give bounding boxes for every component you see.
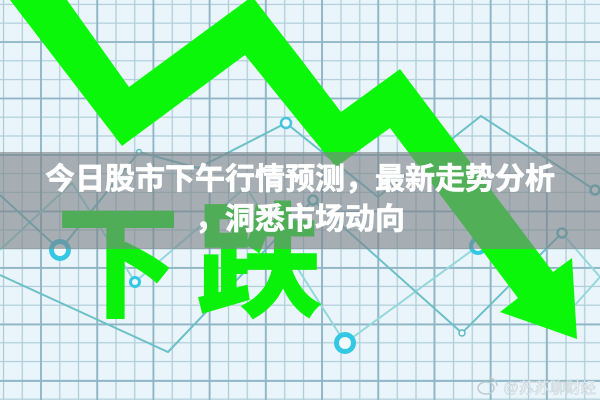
line chart: dark teal series <box>0 116 600 352</box>
translucent title band <box>0 152 600 249</box>
title: ，洞悉市场动向 <box>195 203 405 236</box>
lettering: 下: 下 <box>57 197 179 333</box>
title <box>45 162 555 236</box>
title: 今日股市下午行情预测，最新走势分析 <box>45 163 555 196</box>
watermark text: @苏苏聊财经 <box>503 379 596 397</box>
icon: weibo logo <box>478 378 497 394</box>
line chart: light teal series <box>0 183 600 343</box>
lettering: 跌: 跌 <box>197 195 321 333</box>
chart markers <box>52 118 600 352</box>
